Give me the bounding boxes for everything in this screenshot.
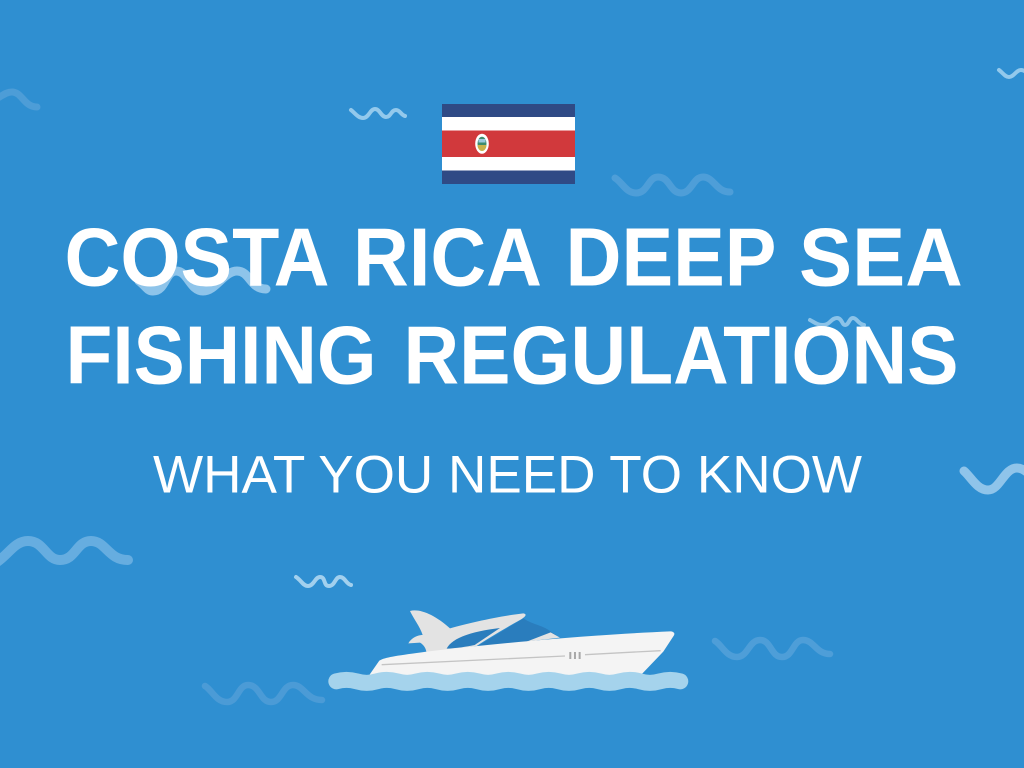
title: DEEP: [566, 211, 776, 304]
boat: hull: [369, 631, 674, 676]
title: RICA: [353, 211, 542, 304]
boat: windshield glass: [477, 618, 560, 647]
boat illustration: [336, 610, 680, 683]
flag of Costa Rica: [442, 104, 575, 184]
title: [64, 211, 963, 401]
title: SEA: [799, 211, 963, 304]
title: FISHING: [66, 308, 376, 401]
title: REGULATIONS: [404, 308, 958, 401]
subtitle: WHAT YOU NEED TO KNOW: [153, 446, 862, 504]
icon: coat of arms: [475, 134, 489, 154]
title: COSTA: [64, 211, 330, 304]
water wave under boat: [336, 680, 680, 683]
boat: flybridge and radar arch: [408, 610, 526, 653]
boat: hull stripe and vents: [382, 651, 661, 665]
boat: side window: [447, 628, 500, 649]
